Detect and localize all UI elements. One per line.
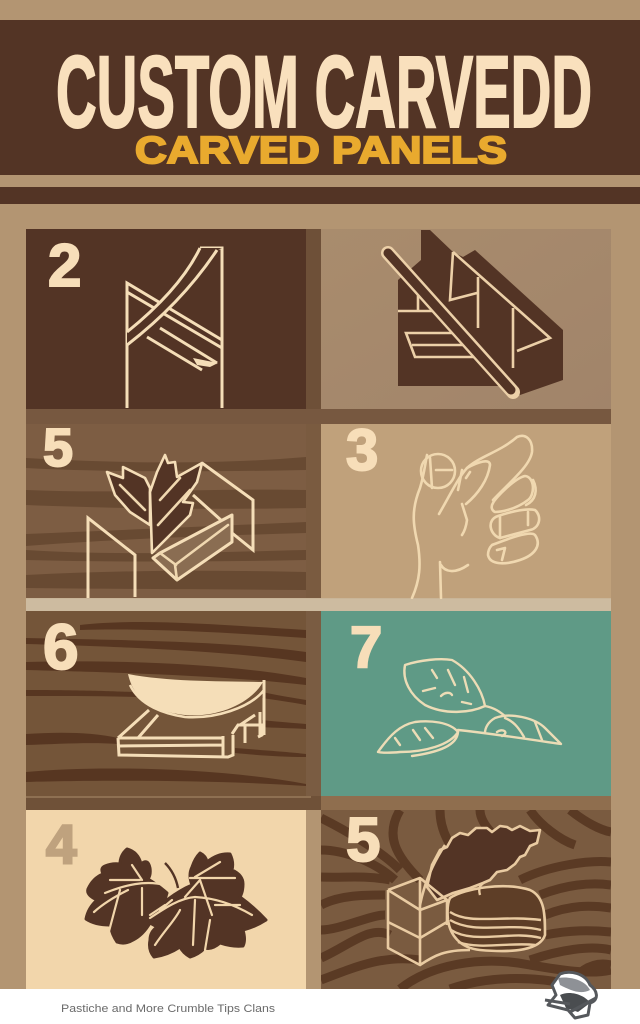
icon: bowl on block [118,674,264,757]
number 3: 3 [346,418,378,483]
number 6: 6 [43,611,79,683]
panel: step 3 staircase joint [321,229,611,409]
number 7: 7 [350,615,382,680]
icon: feather and carved drum [388,826,545,965]
number 2: 2 [48,232,81,299]
panel: step 3 hand [321,418,611,598]
panel: step 6 bowl on block [26,611,311,797]
panel: step 7 teal leaves [321,611,611,796]
header banner [0,20,640,204]
icon: staircase joint [388,230,563,395]
icon: frame with curved brace [127,248,222,408]
column and row dividers [26,229,611,810]
panel: step 5 feather and drum [321,806,611,989]
icon: leaf in box [88,455,253,598]
panel: step 5 wood leaf box [26,418,306,598]
panel: step 2 chair frame [26,229,306,409]
icon: pair of leaves [86,849,266,957]
panel: step 4 dark leaves [26,810,306,989]
number 5: 5 [346,806,380,875]
number 4: 4 [46,813,77,875]
icon: hand with chisel grip [412,436,539,598]
icon: footer flower logo [545,972,596,1018]
light plank strip [26,599,611,611]
footer background [0,989,640,1024]
subtitle: CARVED PANELS [135,130,507,172]
number 5: 5 [43,418,73,478]
footer caption: Pastiche and More Crumble Tips Clans [61,1003,276,1015]
icon: three leaves [378,659,561,756]
